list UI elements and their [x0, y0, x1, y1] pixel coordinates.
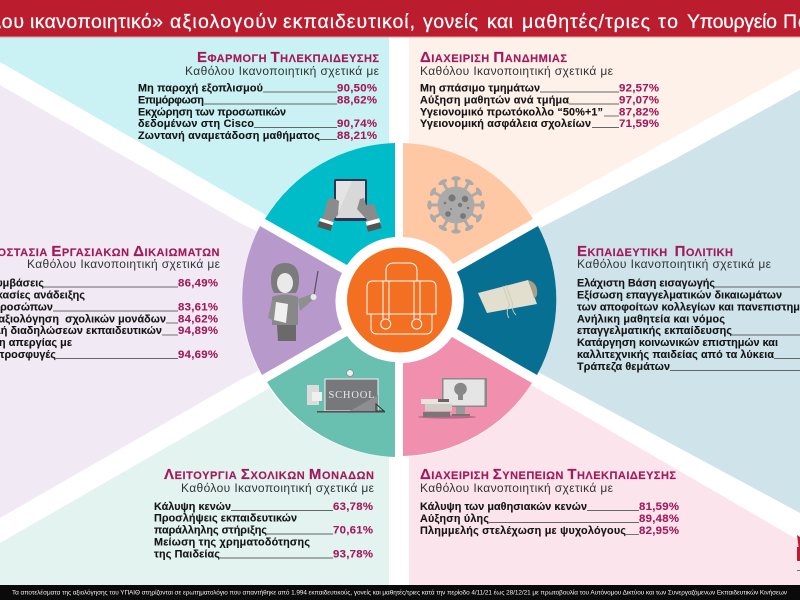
center circle with bag icon — [347, 248, 452, 352]
results list — [420, 82, 659, 130]
subtitle: Καθόλου Ικανοποιητική σχετικά με — [185, 64, 380, 78]
subtitle: Καθόλου Ικανοποιητική σχετικά με — [181, 481, 375, 495]
results list: δεδομένων στη Cisco — [138, 118, 254, 130]
results list: καλλιτεχνικής παιδείας από τα λύκεια — [577, 349, 774, 361]
results list: Αύξηση ύλης — [420, 513, 489, 525]
icon: virus — [427, 176, 485, 234]
results list: της Παιδείας — [154, 548, 220, 560]
heading: ΕΚΠΑΙΔΕΥΤΙΚΗ ΠΟΛΙΤΙΚΗ — [577, 243, 733, 260]
icon: monitor with books — [418, 378, 487, 419]
heading: ΛΕΙΤΟΥΡΓΙΑ ΣΧΟΛΙΚΩΝ ΜΟΝΑΔΩΝ — [164, 466, 374, 483]
results list: 93,78% — [333, 548, 373, 560]
results list: Πλημμελής στελέχωση με ψυχολόγους — [420, 525, 626, 537]
results list: Προσλήψεις εκπαιδευτικών — [154, 512, 297, 524]
results list: Ζωντανή αναμετάδοση μαθήματος — [138, 130, 320, 142]
logo fragment — [797, 535, 800, 571]
results list: 87,82% — [619, 106, 659, 118]
results list: Μείωση της χρηματοδότησης — [154, 536, 310, 548]
results list — [154, 501, 373, 560]
results list: Υγειονομική ασφάλεια σχολείων — [420, 118, 591, 130]
results list: 88,62% — [337, 94, 377, 106]
subtitle: Καθόλου Ικανοποιητική σχετικά με — [420, 481, 614, 495]
results list: 86,49% — [178, 278, 218, 290]
background panel: cyan top left — [0, 37, 389, 286]
results list — [577, 278, 800, 373]
results list: 82,95% — [639, 525, 679, 537]
wheel segment: purple — [242, 226, 342, 375]
panel: Εκπαιδευτική Πολιτική — [577, 243, 800, 373]
results list: Αύξηση μαθητών ανά τμήμα — [420, 94, 569, 106]
background panel: mint bottom left — [0, 319, 389, 585]
results list: Εξίσωση επαγγελματικών δικαιωμάτων — [577, 290, 782, 302]
footer note: Τα αποτελέσματα της αξιολόγησης του ΥΠΑΙΘ στηρίζονται σε ερωτηματολόγιο που απαντήθηκε από 1.994 εκπαιδευτικούς, γονείς και μαθητές/τριες κατά την περίοδο 4/11/21 έως 28/12/21 με πρωτοβουλία του Αυτόνομου Δικτύου και των Συνεργαζόμενων Εκπαιδευτικών Κινήσεων — [12, 588, 787, 596]
results list — [0, 278, 218, 361]
results list: 90,50% — [337, 82, 377, 94]
panel: Διαχείριση Πανδημίας — [420, 49, 659, 130]
wheel segment: peach — [403, 143, 533, 264]
wheel backing disc — [242, 143, 556, 457]
results list: Επιμόρφωση — [138, 94, 204, 106]
results list: 81,59% — [639, 501, 679, 513]
header banner — [0, 0, 800, 37]
results list: Κατάργηση κοινωνικών επιστημών και — [577, 337, 778, 349]
footer bar — [0, 585, 800, 600]
results list: Κάλυψη κενών — [154, 501, 231, 513]
icon: teacher — [268, 263, 318, 341]
results list: 63,78% — [333, 501, 373, 513]
results list — [420, 501, 679, 537]
heading: ΕΦΑΡΜΟΓΗ ΤΗΛΕΚΠΑΙΔΕΥΣΗΣ — [197, 49, 379, 66]
icon: school blackboard — [307, 370, 385, 413]
results list: 94,69% — [178, 349, 218, 361]
results list — [138, 82, 377, 142]
header title: αξιολογούν — [170, 11, 277, 33]
header title: Υπουργείο — [687, 11, 777, 33]
panel: Λειτουργία Σχολικών Μονάδων — [154, 466, 375, 560]
results list: 71,59% — [619, 118, 659, 130]
panel: Εφαρμογή Τηλεκπαίδευσης — [138, 49, 380, 142]
background panel: lilac left — [0, 85, 399, 518]
results list: Ανήλικη μαθητεία και νόμος — [577, 314, 725, 326]
heading: ΔΙΑΧΕΙΡΙΣΗ ΠΑΝΔΗΜΙΑΣ — [420, 49, 567, 66]
subtitle: Καθόλου Ικανοποιητική σχετικά με — [27, 257, 221, 271]
results list: Εκχώρηση των προσωπικών — [138, 106, 286, 118]
icon: school blackboard: SCHOOL — [328, 390, 374, 401]
results list: 94,89% — [178, 325, 218, 337]
results list: 89,48% — [639, 513, 679, 525]
background panel: blue right — [399, 90, 800, 513]
results list: 88,21% — [337, 130, 377, 142]
subtitle: Καθόλου Ικανοποιητική σχετικά με — [577, 257, 772, 271]
background panel: peach top right — [409, 37, 800, 283]
results list: 92,57% — [619, 82, 659, 94]
wheel segment: dark blue — [457, 226, 556, 375]
results list: 83,61% — [178, 302, 218, 314]
header title — [0, 11, 800, 33]
results list: επαγγελματικής εκπαίδευσης — [577, 325, 732, 337]
header title: γονείς — [423, 11, 478, 33]
background panel: pink bottom right — [409, 314, 800, 585]
header title: και — [487, 11, 513, 33]
header title: εκπαιδευτικοί, — [283, 11, 415, 33]
results list: Κάλυψη των μαθησιακών κενών — [420, 501, 587, 513]
panel: Διαχείριση Συνεπειών Τηλεκπαίδευσης — [420, 466, 679, 537]
results list: Ελάχιστη Βάση εισαγωγής — [577, 278, 715, 290]
wheel segment: pink — [403, 337, 532, 456]
panel: Προστασία Εργασιακών Δικαιωμάτων — [0, 243, 221, 361]
wheel segment: teal — [265, 143, 395, 265]
results list: 70,61% — [333, 524, 373, 536]
heading: ΔΙΑΧΕΙΡΙΣΗ ΣΥΝΕΠΕΙΩΝ ΤΗΛΕΚΠΑΙΔΕΥΣΗΣ — [420, 466, 676, 483]
icon: tablet with hands — [317, 179, 382, 232]
header title: μαθητές/τριες — [522, 11, 650, 33]
results list: 84,62% — [178, 314, 218, 326]
subtitle: Καθόλου Ικανοποιητική σχετικά με — [420, 64, 614, 78]
results list: Υγειονομικό πρωτόκολλο “50%+1” — [420, 106, 603, 118]
icon: diploma scroll — [478, 280, 537, 318]
results list: Τράπεζα θεμάτων — [577, 361, 670, 373]
wheel segment: green — [267, 336, 395, 457]
results list: Μη παροχή εξοπλισμού — [138, 82, 263, 94]
header title: το — [658, 11, 678, 33]
results list: παράλληλης στήριξης — [154, 524, 267, 536]
results list: Μη σπάσιμο τμημάτων — [420, 82, 540, 94]
results list: 97,07% — [619, 94, 659, 106]
header title: ικανοποιητικό» — [30, 11, 163, 33]
results list: 90,74% — [337, 118, 377, 130]
